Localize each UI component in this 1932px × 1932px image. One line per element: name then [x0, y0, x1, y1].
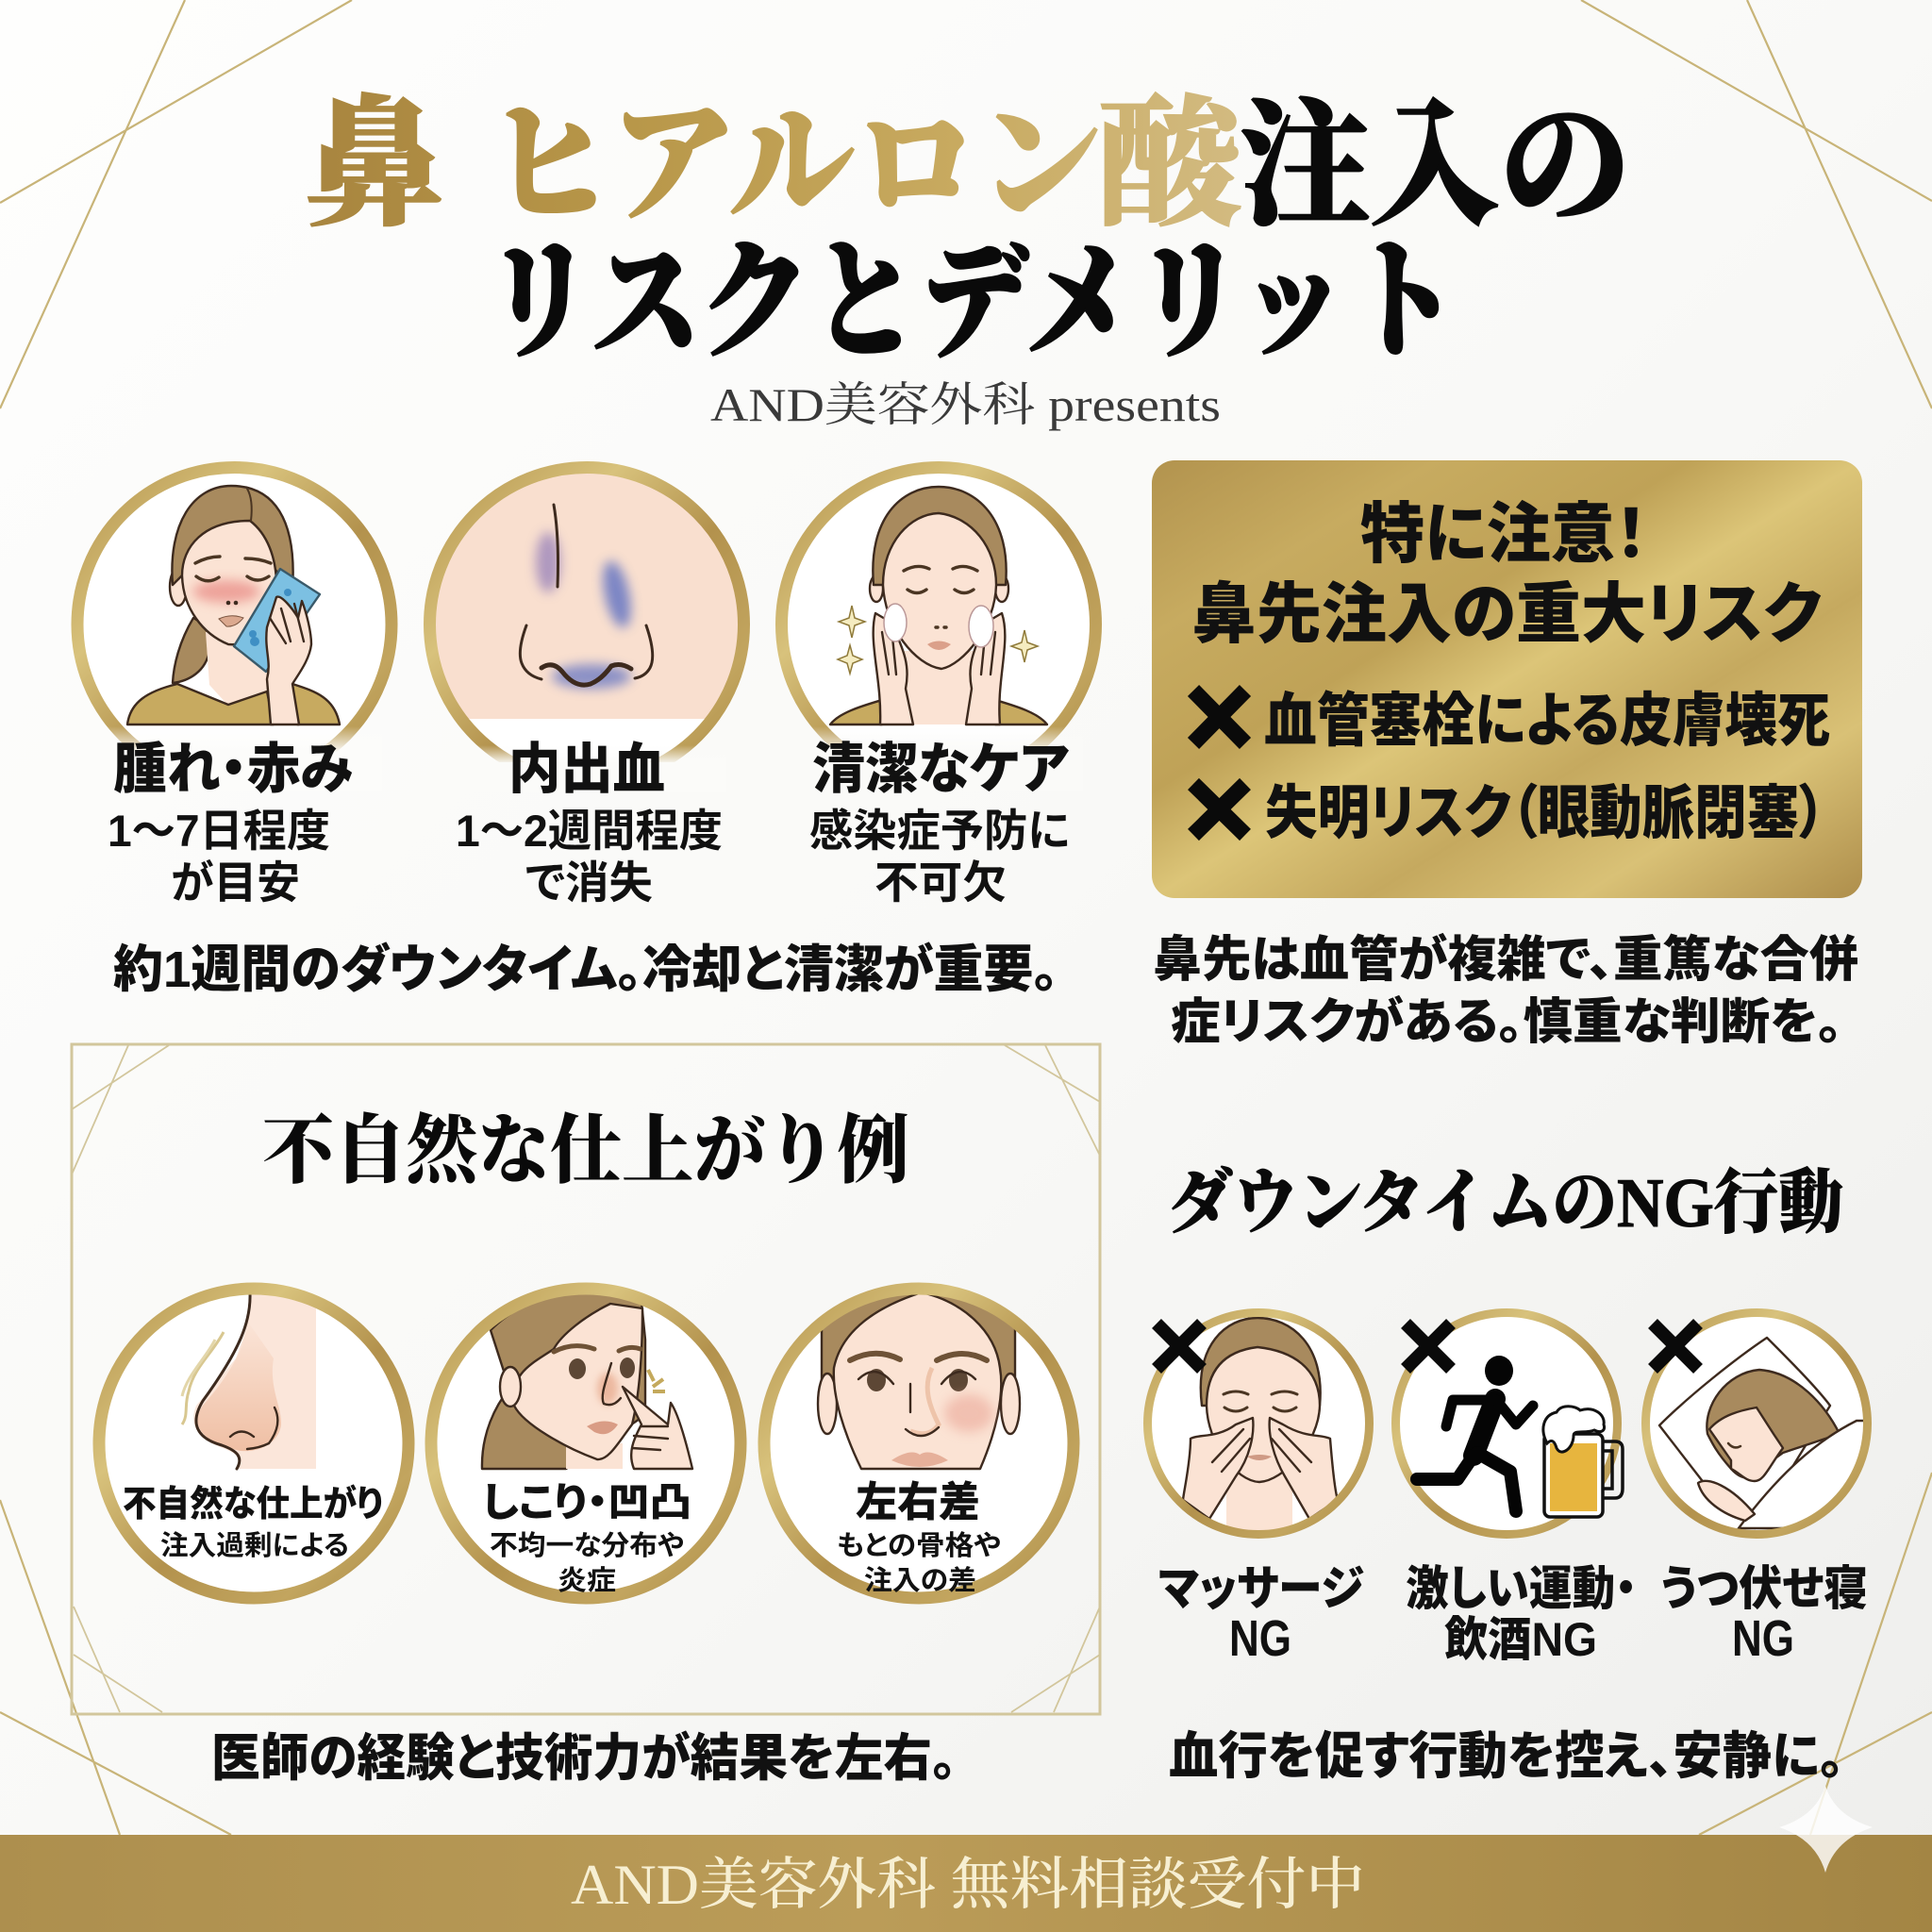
downtime labels: 内出血 [508, 739, 665, 800]
frame caption: 医師の経験と技術力が結果を左右。 [211, 1729, 957, 1787]
title [304, 89, 1630, 375]
risk 2: 失明リスク（眼動脈閉塞） [1265, 781, 1825, 846]
downtime labels: 清潔なケア [812, 739, 1070, 800]
label: 左右差 [856, 1479, 980, 1525]
NG labels [1158, 1562, 1868, 1667]
circle: clean care [781, 468, 1096, 791]
panel: downtime [77, 453, 1096, 998]
heading: ダウンタイムのNG行動 [1168, 1165, 1843, 1242]
footer band: AND美容外科 無料相談受付中 [571, 1854, 1365, 1916]
NG labels: マッサージ [1158, 1562, 1364, 1615]
label: 不均一な分布や [490, 1530, 684, 1561]
risk 1: 血管塞栓による皮膚壊死 [1264, 689, 1830, 754]
icon: cross 2 [1193, 784, 1245, 835]
label: しこり・凹凸 [482, 1480, 691, 1524]
icon: beer mug [1543, 1407, 1623, 1517]
downtime labels: が目安 [171, 858, 300, 908]
downtime summary: 約1週間のダウンタイム。冷却と清潔が重要。 [113, 941, 1058, 998]
subtitle: AND美容外科 presents [710, 378, 1221, 431]
icon: nose with bruises [520, 505, 653, 689]
icon: asymmetric face [818, 1288, 1020, 1469]
title line 1: gold part: ヒアルロン [488, 92, 1101, 239]
downtime labels: 不可欠 [874, 858, 1007, 908]
title line 1: black part: 注入の [1240, 92, 1630, 242]
downtime labels: で消失 [525, 858, 653, 908]
downtime labels: 1〜7日程度 [108, 806, 330, 856]
risk description: 症リスクがある。慎重な判断を。 [1171, 994, 1842, 1050]
icon: sleeping woman [1659, 1338, 1887, 1528]
icon: woman pointing at nose [482, 1292, 692, 1469]
downtime labels: 感染症予防に [809, 806, 1070, 856]
label: もとの骨格や [837, 1530, 1001, 1561]
label [837, 1479, 1001, 1596]
circle: swelling and redness [77, 468, 391, 791]
title line 1: gold part: 鼻 [304, 89, 445, 243]
downtime labels [108, 739, 1070, 908]
icon: hands massaging nose [1183, 1318, 1338, 1547]
heading: 特に注意！ [1360, 497, 1647, 571]
risk description: 鼻先は血管が複雑で、重篤な合併 [1153, 932, 1858, 988]
icon: runner [1417, 1356, 1533, 1511]
circle: asymmetry [764, 1288, 1074, 1598]
icon: cross 1 [1193, 691, 1245, 743]
icon: side nose [182, 1293, 316, 1469]
sparkle [1779, 1786, 1873, 1873]
title line 1: gold part: 酸 [1098, 89, 1250, 243]
label: 注入過剰による [160, 1530, 349, 1561]
frame [72, 1044, 1100, 1714]
NG labels: うつ伏せ寝 [1660, 1562, 1868, 1615]
title line 1: gold part [304, 89, 1250, 243]
circle: lumps [431, 1289, 741, 1598]
label: 注入の差 [864, 1565, 976, 1596]
label [482, 1480, 691, 1596]
label: 不自然な仕上がり [123, 1484, 383, 1524]
label [123, 1484, 383, 1561]
icon: cross [1406, 1324, 1451, 1369]
circle: unnatural result [99, 1289, 408, 1598]
NG caption: 血行を促す行動を控え、安静に。 [1169, 1728, 1844, 1785]
icon: cross [1653, 1324, 1698, 1369]
circle: exercise and alcohol NG [1396, 1313, 1623, 1534]
panel: serious risk [1152, 460, 1862, 1050]
title line 2: リスクとデメリット [484, 233, 1457, 375]
gold callout box: 鼻先注入の重大リスク [1191, 577, 1822, 651]
icon: woman washing face [830, 487, 1047, 724]
icon: woman with ice pack [127, 486, 340, 724]
NG labels: NG [1732, 1610, 1794, 1667]
gold callout box [1152, 460, 1862, 898]
circle: bruising [424, 461, 750, 762]
heading: 不自然な仕上がり例 [262, 1110, 909, 1193]
panel: NG behaviours [1147, 1165, 1887, 1785]
icon: cross [1157, 1324, 1202, 1369]
footer band [0, 1835, 1932, 1932]
label: 炎症 [558, 1565, 616, 1596]
NG labels: 激しい運動・ [1406, 1562, 1637, 1615]
panel: unnatural results [72, 1044, 1100, 1714]
downtime labels: 1〜2週間程度 [456, 806, 723, 856]
circle: massage NG [1147, 1313, 1370, 1547]
downtime labels: 腫れ・赤み [113, 739, 353, 800]
NG labels: 飲酒NG [1444, 1613, 1597, 1666]
circle: sleeping face-down NG [1645, 1313, 1887, 1534]
risk description [1153, 932, 1858, 1050]
NG labels: NG [1229, 1610, 1291, 1667]
